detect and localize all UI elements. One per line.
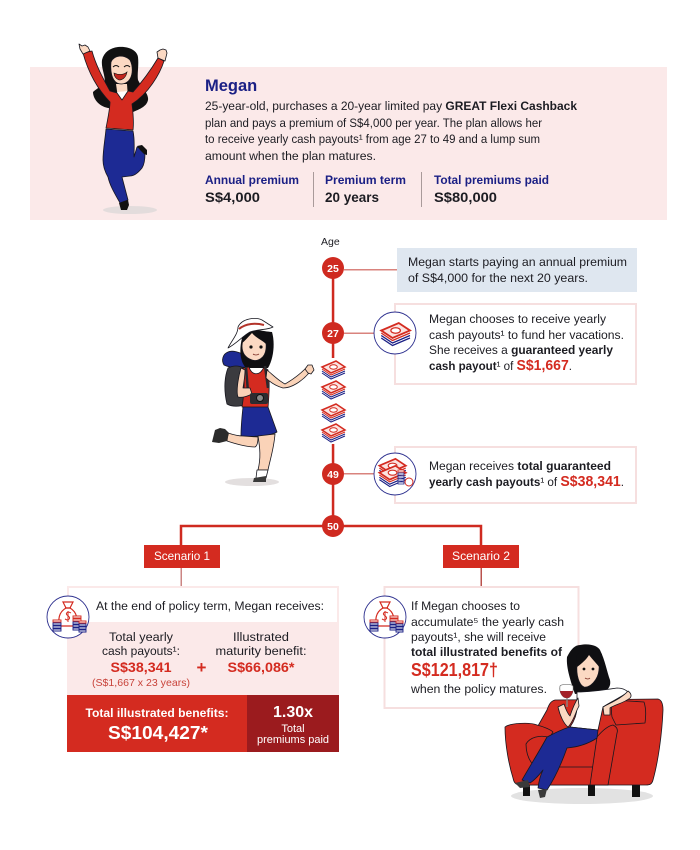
text: total yearly cash payouts: (S$1,667 x 23 years)	[92, 677, 190, 689]
multiple of total premiums paid	[247, 695, 339, 752]
panel: age 25 note	[397, 248, 637, 292]
panel: scenario 1	[67, 586, 339, 752]
total illustrated benefits	[67, 695, 247, 752]
heading: Megan: Megan	[205, 77, 257, 95]
text block: plan description	[205, 99, 577, 163]
stat: premium term: Premium term	[325, 173, 406, 187]
age marker 27	[322, 322, 344, 344]
age marker 25	[322, 257, 344, 279]
illustration: Megan the traveller	[212, 318, 314, 486]
panel: age 49 note: yearly cash payouts¹ of S$38,341.	[429, 473, 624, 490]
panel: age 27 note	[395, 304, 636, 384]
panel: scenario 2	[384, 587, 578, 708]
panel: age 27 note: cash payouts¹ to fund her vacations.	[429, 328, 624, 342]
text block: plan description: 25-year-old, purchases a 20-year limited pay GREAT Flexi Cashback	[205, 99, 577, 113]
text block: plan description: to receive yearly cash payouts¹ from age 27 to 49 and a lump sum	[205, 132, 540, 146]
text block: plan description: amount when the plan matures.	[205, 149, 376, 163]
illustration: Megan on red armchair	[505, 644, 663, 804]
icon: cash and coins	[374, 453, 416, 495]
text: total yearly cash payouts: cash payouts¹:	[102, 644, 180, 658]
timeline	[180, 257, 482, 588]
stat: annual premium: S$4,000	[205, 189, 260, 205]
text: illustrated maturity benefit	[216, 630, 306, 675]
panel: scenario 2: If Megan chooses to	[411, 599, 520, 613]
total illustrated benefits: Total illustrated benefits:	[86, 706, 228, 720]
text: end of policy term: At the end of policy term, Megan receives:	[96, 599, 324, 613]
icons: stack of cash along timeline	[322, 361, 345, 442]
stat: annual premium: Annual premium	[205, 173, 299, 187]
illustration: Megan jumping	[79, 44, 167, 214]
panel: scenario 2: when the policy matures.	[410, 682, 547, 696]
panel: age 27 note: cash payout¹ of S$1,667.	[429, 357, 572, 374]
stat: total premiums paid: Total premiums paid	[434, 173, 549, 187]
scenario 2 tag: Scenario 2	[452, 549, 510, 563]
stat: premium term	[325, 173, 406, 205]
multiple of total premiums paid: 1.30x	[273, 704, 313, 721]
total illustrated benefits: S$104,427*	[108, 722, 209, 743]
branch connector	[181, 526, 481, 545]
panel: Megan profile	[30, 67, 667, 220]
age marker 27: 27	[327, 328, 339, 340]
text: illustrated maturity benefit: S$66,086*	[228, 659, 295, 675]
panel: scenario 2: total illustrated benefits of	[411, 645, 563, 659]
age marker 49: 49	[327, 469, 339, 481]
scenario 1 tag	[144, 545, 220, 568]
panel: scenario 2: S$121,817†	[411, 660, 498, 680]
age marker 25: 25	[327, 263, 339, 275]
stat: premium term: 20 years	[325, 189, 379, 205]
scenario 2 tag	[443, 545, 519, 568]
panel: age 49 note	[395, 447, 636, 503]
text: total yearly cash payouts: S$38,341	[110, 659, 172, 675]
panel: age 27 note: She receives a guaranteed yearly	[429, 343, 613, 357]
stat: annual premium	[205, 173, 299, 205]
plus sign: +	[197, 658, 207, 677]
multiple of total premiums paid: premiums paid	[257, 734, 329, 746]
text: total yearly cash payouts	[92, 630, 190, 689]
icon: money bag, scenario 1	[47, 596, 89, 638]
age marker 50: 50	[327, 521, 339, 533]
panel: scenario 2: accumulate⁵ the yearly cash	[411, 615, 564, 629]
panel: age 25 note: of S$4,000 for the next 20 years.	[408, 271, 588, 285]
multiple of total premiums paid: Total	[281, 723, 305, 735]
icon: cash stack	[374, 312, 416, 354]
text: total yearly cash payouts: Total yearly	[109, 630, 174, 644]
text: illustrated maturity benefit: Illustrated	[233, 630, 289, 644]
label: Age: Age	[321, 236, 340, 248]
stat: total premiums paid: S$80,000	[434, 189, 497, 205]
age marker 50	[322, 515, 344, 537]
stat: total premiums paid	[434, 173, 549, 205]
panel: age 49 note: Megan receives total guaranteed	[429, 459, 611, 473]
panel: age 25 note: Megan starts paying an annual premium	[408, 255, 627, 269]
scenario 1 tag: Scenario 1	[154, 549, 210, 563]
icon: money bag, scenario 2	[364, 596, 406, 638]
text block: plan description: plan and pays a premium of S$4,000 per year. The plan allows her	[205, 116, 542, 130]
panel: scenario 2: payouts¹, she will receive	[411, 630, 546, 644]
age marker 49	[322, 463, 344, 485]
panel: age 27 note: Megan chooses to receive yearly	[429, 312, 607, 326]
text: illustrated maturity benefit: maturity benefit:	[216, 644, 306, 658]
